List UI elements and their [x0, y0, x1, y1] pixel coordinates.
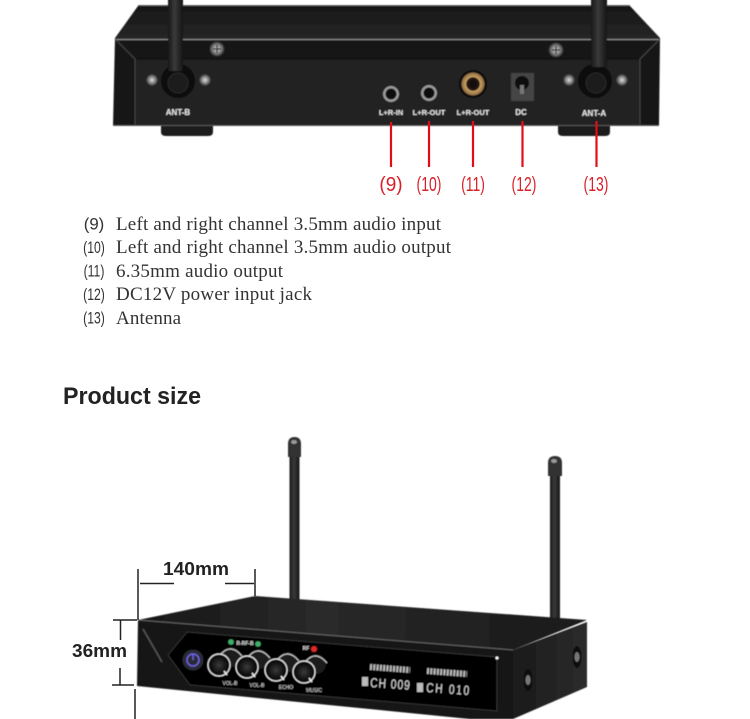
level meter A [370, 667, 410, 670]
3.5mm output jack [421, 85, 437, 101]
panel labels: RF [303, 646, 309, 652]
port labels: ANT-B [166, 108, 190, 117]
callout numbers [379, 172, 608, 196]
screw top right [548, 42, 564, 58]
legend descriptions: 6.35mm audio output [116, 261, 284, 282]
port labels: L+R-OUT [457, 108, 490, 117]
LCD display [362, 667, 471, 698]
callout numbers: (12) [512, 172, 536, 196]
legend descriptions: Left and right channel 3.5mm audio input [116, 214, 442, 235]
back knobs [221, 647, 326, 674]
callout numbers: (11) [461, 172, 485, 196]
top surface [138, 596, 587, 650]
antenna connector B [146, 0, 211, 98]
channel A marker [362, 677, 368, 686]
panel labels [222, 641, 322, 694]
panel labels: VOL-B [249, 683, 265, 689]
channel B readout: CH 010 [426, 681, 471, 698]
corner trim [143, 629, 162, 662]
dimension: 36mm [72, 620, 137, 719]
front face [137, 620, 513, 719]
legend descriptions: Left and right channel 3.5mm audio output [116, 237, 452, 258]
callout numbers: (9) [379, 174, 403, 196]
antenna right [548, 456, 562, 624]
legend numbers: (13) [83, 310, 105, 328]
channel B marker [417, 683, 423, 692]
front view of receiver [137, 437, 587, 719]
port labels [166, 108, 606, 118]
heading: product size: Product size [63, 383, 201, 410]
screw top left [210, 42, 224, 56]
knob pointers [224, 671, 312, 682]
rear view of receiver [113, 0, 660, 136]
callout lines [391, 121, 596, 167]
dimension: 140mm [138, 559, 255, 620]
rubber foot left [161, 124, 213, 136]
antenna left [288, 437, 301, 602]
legend descriptions [116, 214, 452, 329]
channel A readout: CH 009 [370, 676, 411, 693]
legend numbers [83, 215, 105, 328]
top surface [115, 6, 660, 38]
legend numbers: (10) [83, 239, 105, 258]
3.5mm input jack [383, 86, 399, 102]
dimension: 140mm: 140mm [163, 559, 229, 579]
legend numbers: (9) [84, 215, 104, 233]
panel labels: MUSIC [306, 688, 322, 694]
callout numbers: (13) [584, 172, 608, 196]
6.35mm gold jack [459, 70, 487, 98]
legend numbers: (11) [84, 263, 104, 281]
DC power jack [511, 73, 534, 101]
antenna connector A [563, 0, 628, 98]
right side face [513, 622, 587, 719]
port labels: L+R-IN [379, 108, 403, 117]
dimension: 36mm: 36mm [72, 641, 127, 661]
legend descriptions: DC12V power input jack [116, 284, 312, 305]
level meter B [427, 671, 467, 674]
power button [182, 650, 204, 670]
panel labels: VOL-B [222, 681, 238, 687]
glossy control panel [168, 632, 497, 711]
panel corner light [496, 656, 498, 660]
port labels: ANT-A [582, 109, 606, 118]
rubber foot right [558, 124, 610, 136]
port labels: L+R-OUT [413, 108, 446, 117]
legend list [83, 214, 452, 329]
panel labels: R-RF-B [236, 641, 254, 647]
port labels: DC [515, 108, 527, 117]
chassis rear face [113, 38, 660, 126]
legend numbers: (12) [83, 286, 105, 305]
knob scale arcs [221, 649, 327, 663]
legend descriptions: Antenna [116, 308, 182, 329]
callout numbers: (10) [417, 172, 441, 196]
volume knobs [208, 654, 315, 683]
status LEDs [228, 639, 317, 652]
panel labels: ECHO [279, 685, 293, 691]
side screws [524, 646, 582, 691]
